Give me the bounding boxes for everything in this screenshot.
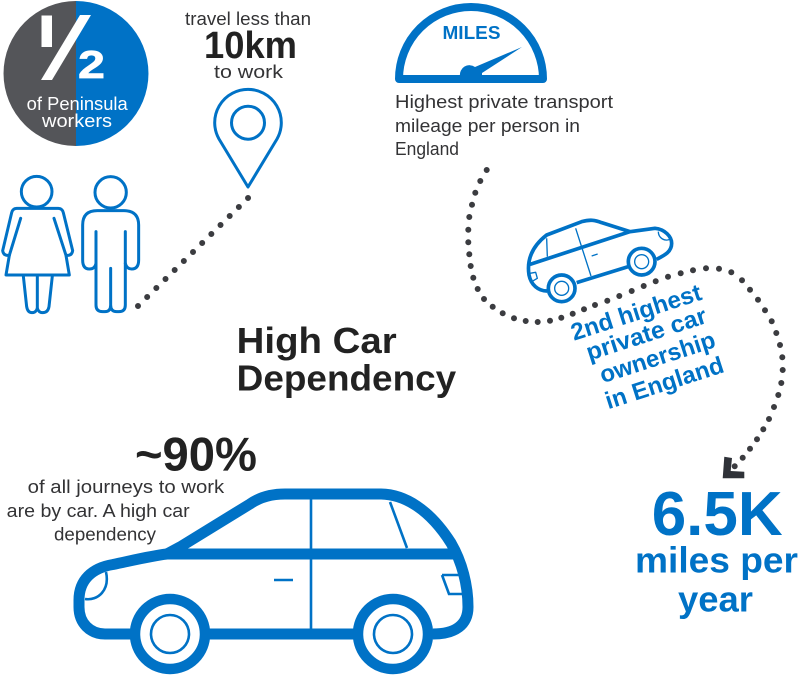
stat: 6.5K miles per year: year (678, 579, 753, 620)
text: travel less than 10km to work: 10km (204, 25, 297, 67)
stat: ~90% of journeys by car: are by car. A high car (7, 501, 190, 521)
icon: map pin (215, 89, 281, 187)
text: highest private transport mileage: Highest private transport (395, 92, 613, 112)
text: travel less than 10km to work: travel less than (185, 9, 311, 29)
text: highest private transport mileage: England (395, 139, 459, 159)
half of workers circle: 1 (33, 5, 59, 57)
half of workers circle (4, 1, 148, 146)
text: 2nd highest private car ownership: 2nd highest (568, 279, 705, 346)
stat: ~90% of journeys by car: of all journeys to work (28, 477, 225, 497)
stat: 6.5K miles per year (635, 480, 798, 620)
heading: High Car (237, 320, 397, 361)
dotted line: people to pin (138, 198, 248, 306)
text: highest private transport mileage (395, 92, 613, 159)
half of workers circle: of Peninsula (27, 94, 129, 114)
stat: ~90% of journeys by car: ~90% (135, 428, 257, 481)
icon: small car (528, 220, 672, 302)
heading: Dependency (237, 358, 456, 399)
text: travel less than 10km to work: to work (214, 62, 284, 82)
icon: man (83, 177, 139, 312)
stat: ~90% of journeys by car: dependency (54, 525, 156, 545)
icon: speedometer (399, 7, 543, 79)
text: travel less than 10km to work (185, 9, 311, 82)
stat: ~90% of journeys by car (7, 428, 257, 545)
text: 2nd highest private car ownership: ownership (596, 327, 719, 389)
icon: speedometer: MILES (442, 22, 500, 43)
stat: 6.5K miles per year: 6.5K (652, 480, 783, 549)
stat: 6.5K miles per year: miles per (635, 540, 798, 581)
half of workers circle: 2 (78, 44, 105, 87)
icon: woman (3, 176, 73, 313)
text: highest private transport mileage: mileage per person in (395, 116, 580, 136)
text: 2nd highest private car ownership: in England (602, 352, 727, 415)
heading (237, 320, 456, 399)
icon: large car (79, 494, 468, 669)
arrowhead (723, 457, 744, 478)
half of workers circle: workers (41, 111, 112, 131)
dotted line: mileage to 6.5K (468, 170, 783, 466)
text: 2nd highest private car ownership: private car (583, 302, 710, 366)
text: 2nd highest private car ownership (568, 279, 727, 415)
